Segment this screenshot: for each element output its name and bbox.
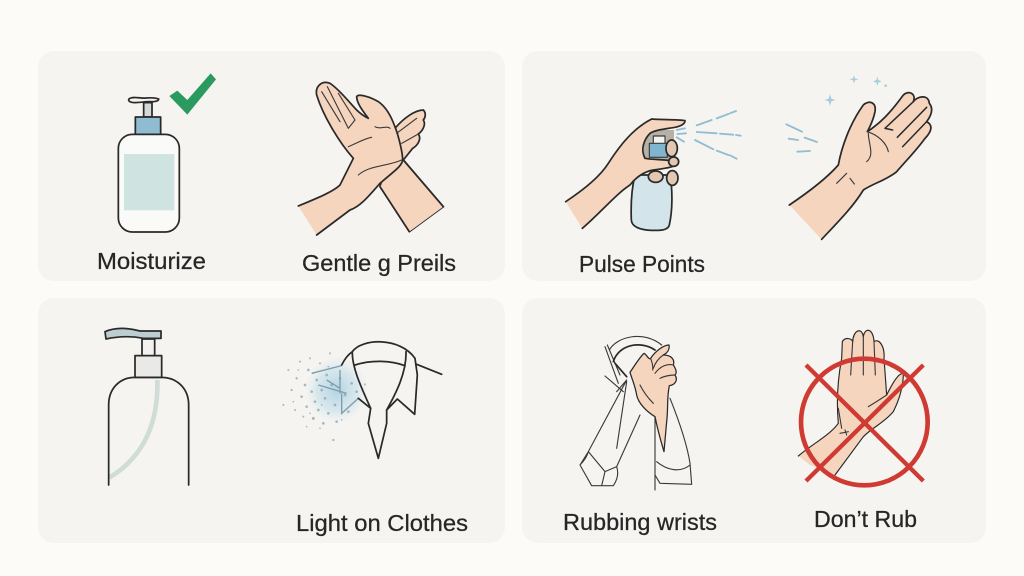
icon: green check mark: [169, 73, 216, 115]
icon: spray mist lines: [677, 111, 741, 159]
label: Pulse Points: Pulse Points: [579, 251, 705, 277]
icon: outline pump bottle: [105, 328, 189, 485]
illustration: crossed hands: [298, 82, 443, 235]
label: Gentle g Preils: Gentle g Preils: [302, 250, 456, 276]
panel: pulse points: [522, 51, 986, 281]
label: Rubbing wrists: Rubbing wrists: [563, 509, 717, 535]
illustration: open hand with sparkles: [789, 93, 932, 239]
illustration: hand spraying bottle: [566, 119, 685, 230]
icon: sparkles and dashes: [786, 75, 887, 152]
panel: light on clothes: [38, 298, 505, 543]
panel: moisturize: [38, 51, 505, 281]
icon: mist sprayed on shirt collar: [282, 342, 442, 458]
icon: hand with red prohibition sign: [798, 330, 928, 485]
label: Moisturize: Moisturize: [97, 248, 206, 274]
label: Light on Clothes: Light on Clothes: [296, 510, 468, 536]
panel: rubbing and don't rub: [522, 298, 986, 543]
icon: lotion pump bottle: [118, 97, 179, 232]
label: Don't Rub: Don’t Rub: [814, 506, 917, 532]
illustration: rubbing wrists with sleeves: [580, 336, 692, 490]
